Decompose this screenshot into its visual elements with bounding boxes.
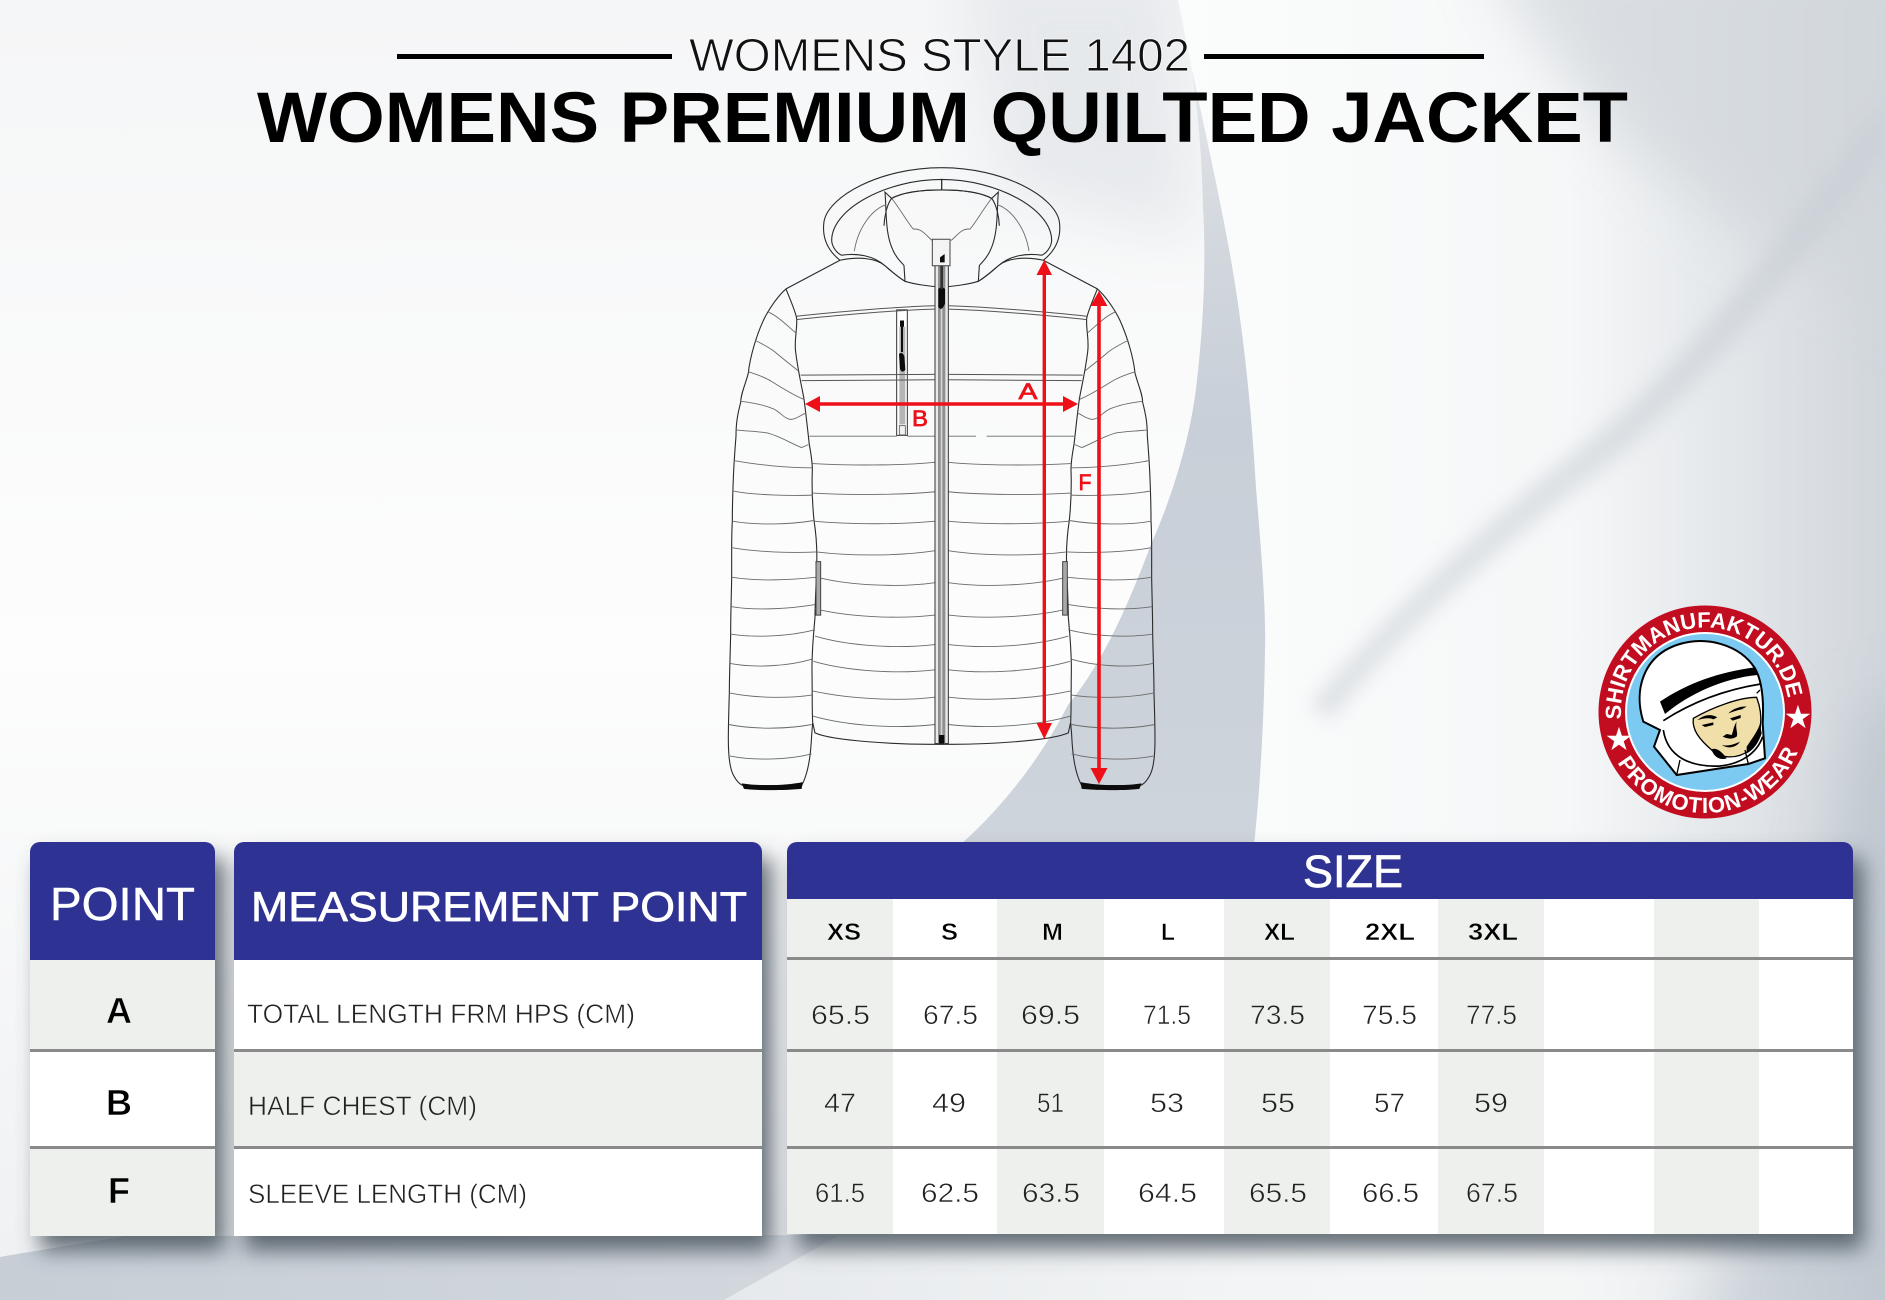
size labels: 3XL [1468,919,1518,946]
logo stars: ★ [1784,699,1812,735]
values: half chest [824,1088,1508,1118]
logo text: upper arc: SHIRTMANUFAKTUR.DE [1606,612,1802,719]
point B: B [106,1082,132,1123]
values: half chest: 47 [824,1088,856,1118]
size labels [827,919,1518,946]
values: total length: 77.5 [1466,1000,1517,1030]
label: A: A [1018,379,1038,404]
values: total length: 71.5 [1143,1000,1191,1030]
title: main heading: WOMENS PREMIUM QUILTED JACKET [257,79,1628,158]
values: sleeve length: 66.5 [1362,1178,1419,1208]
logo text: lower arc: PROMOTION-WEAR [1618,748,1798,813]
title: style line [397,29,1484,81]
jacket technical drawing [728,168,1155,790]
values: half chest: 51 [1037,1088,1064,1118]
values: sleeve length: 65.5 [1249,1178,1307,1208]
size labels: M [1042,919,1063,946]
values: half chest: 59 [1474,1088,1508,1118]
values: half chest: 55 [1261,1088,1295,1118]
values: sleeve length: 63.5 [1022,1178,1080,1208]
point A: A [106,990,132,1031]
size labels: XL [1264,919,1295,946]
heading: size: SIZE [1303,846,1403,897]
table panel: size chart [787,842,1853,1234]
arrow: B half chest [805,396,1078,412]
row label: half chest: HALF CHEST (CM) [248,1091,477,1121]
astronaut [1640,641,1765,775]
label: F: F [1078,470,1092,495]
values: sleeve length: 64.5 [1138,1178,1197,1208]
arrow: F sleeve length [1090,291,1108,784]
values: half chest: 53 [1150,1088,1184,1118]
point F: F [108,1170,130,1211]
heading: measurement point: MEASUREMENT POINT [251,883,747,930]
values: sleeve length: 67.5 [1466,1178,1518,1208]
logo stars: ★ [1605,721,1633,757]
values: total length: 75.5 [1362,1000,1417,1030]
values: total length: 69.5 [1021,1000,1080,1030]
values: half chest: 57 [1374,1088,1405,1118]
size labels: S [941,919,958,946]
table panel: point column [30,842,215,1236]
values: total length: 67.5 [923,1000,978,1030]
row label: total length: TOTAL LENGTH FRM HPS (CM) [247,999,635,1029]
size labels: XS [827,919,861,946]
table panel: measurement point column [234,842,762,1236]
values: sleeve length [815,1178,1518,1208]
title: style line: WOMENS STYLE 1402 [689,29,1190,81]
heading: point: POINT [50,878,195,930]
values: sleeve length: 62.5 [921,1178,979,1208]
measurement arrows [805,260,1108,784]
logo badge [1598,606,1812,818]
logo stars [1605,699,1812,757]
size labels: L [1161,919,1175,946]
size labels: 2XL [1365,919,1415,946]
values: total length: 65.5 [811,1000,870,1030]
values: half chest: 49 [932,1088,966,1118]
values: sleeve length: 61.5 [815,1178,865,1208]
values: total length: 73.5 [1250,1000,1305,1030]
values: total length [811,1000,1517,1030]
row label: sleeve length: SLEEVE LENGTH (CM) [248,1179,527,1209]
arrow: A total length [1036,260,1052,739]
label: B: B [912,406,928,431]
